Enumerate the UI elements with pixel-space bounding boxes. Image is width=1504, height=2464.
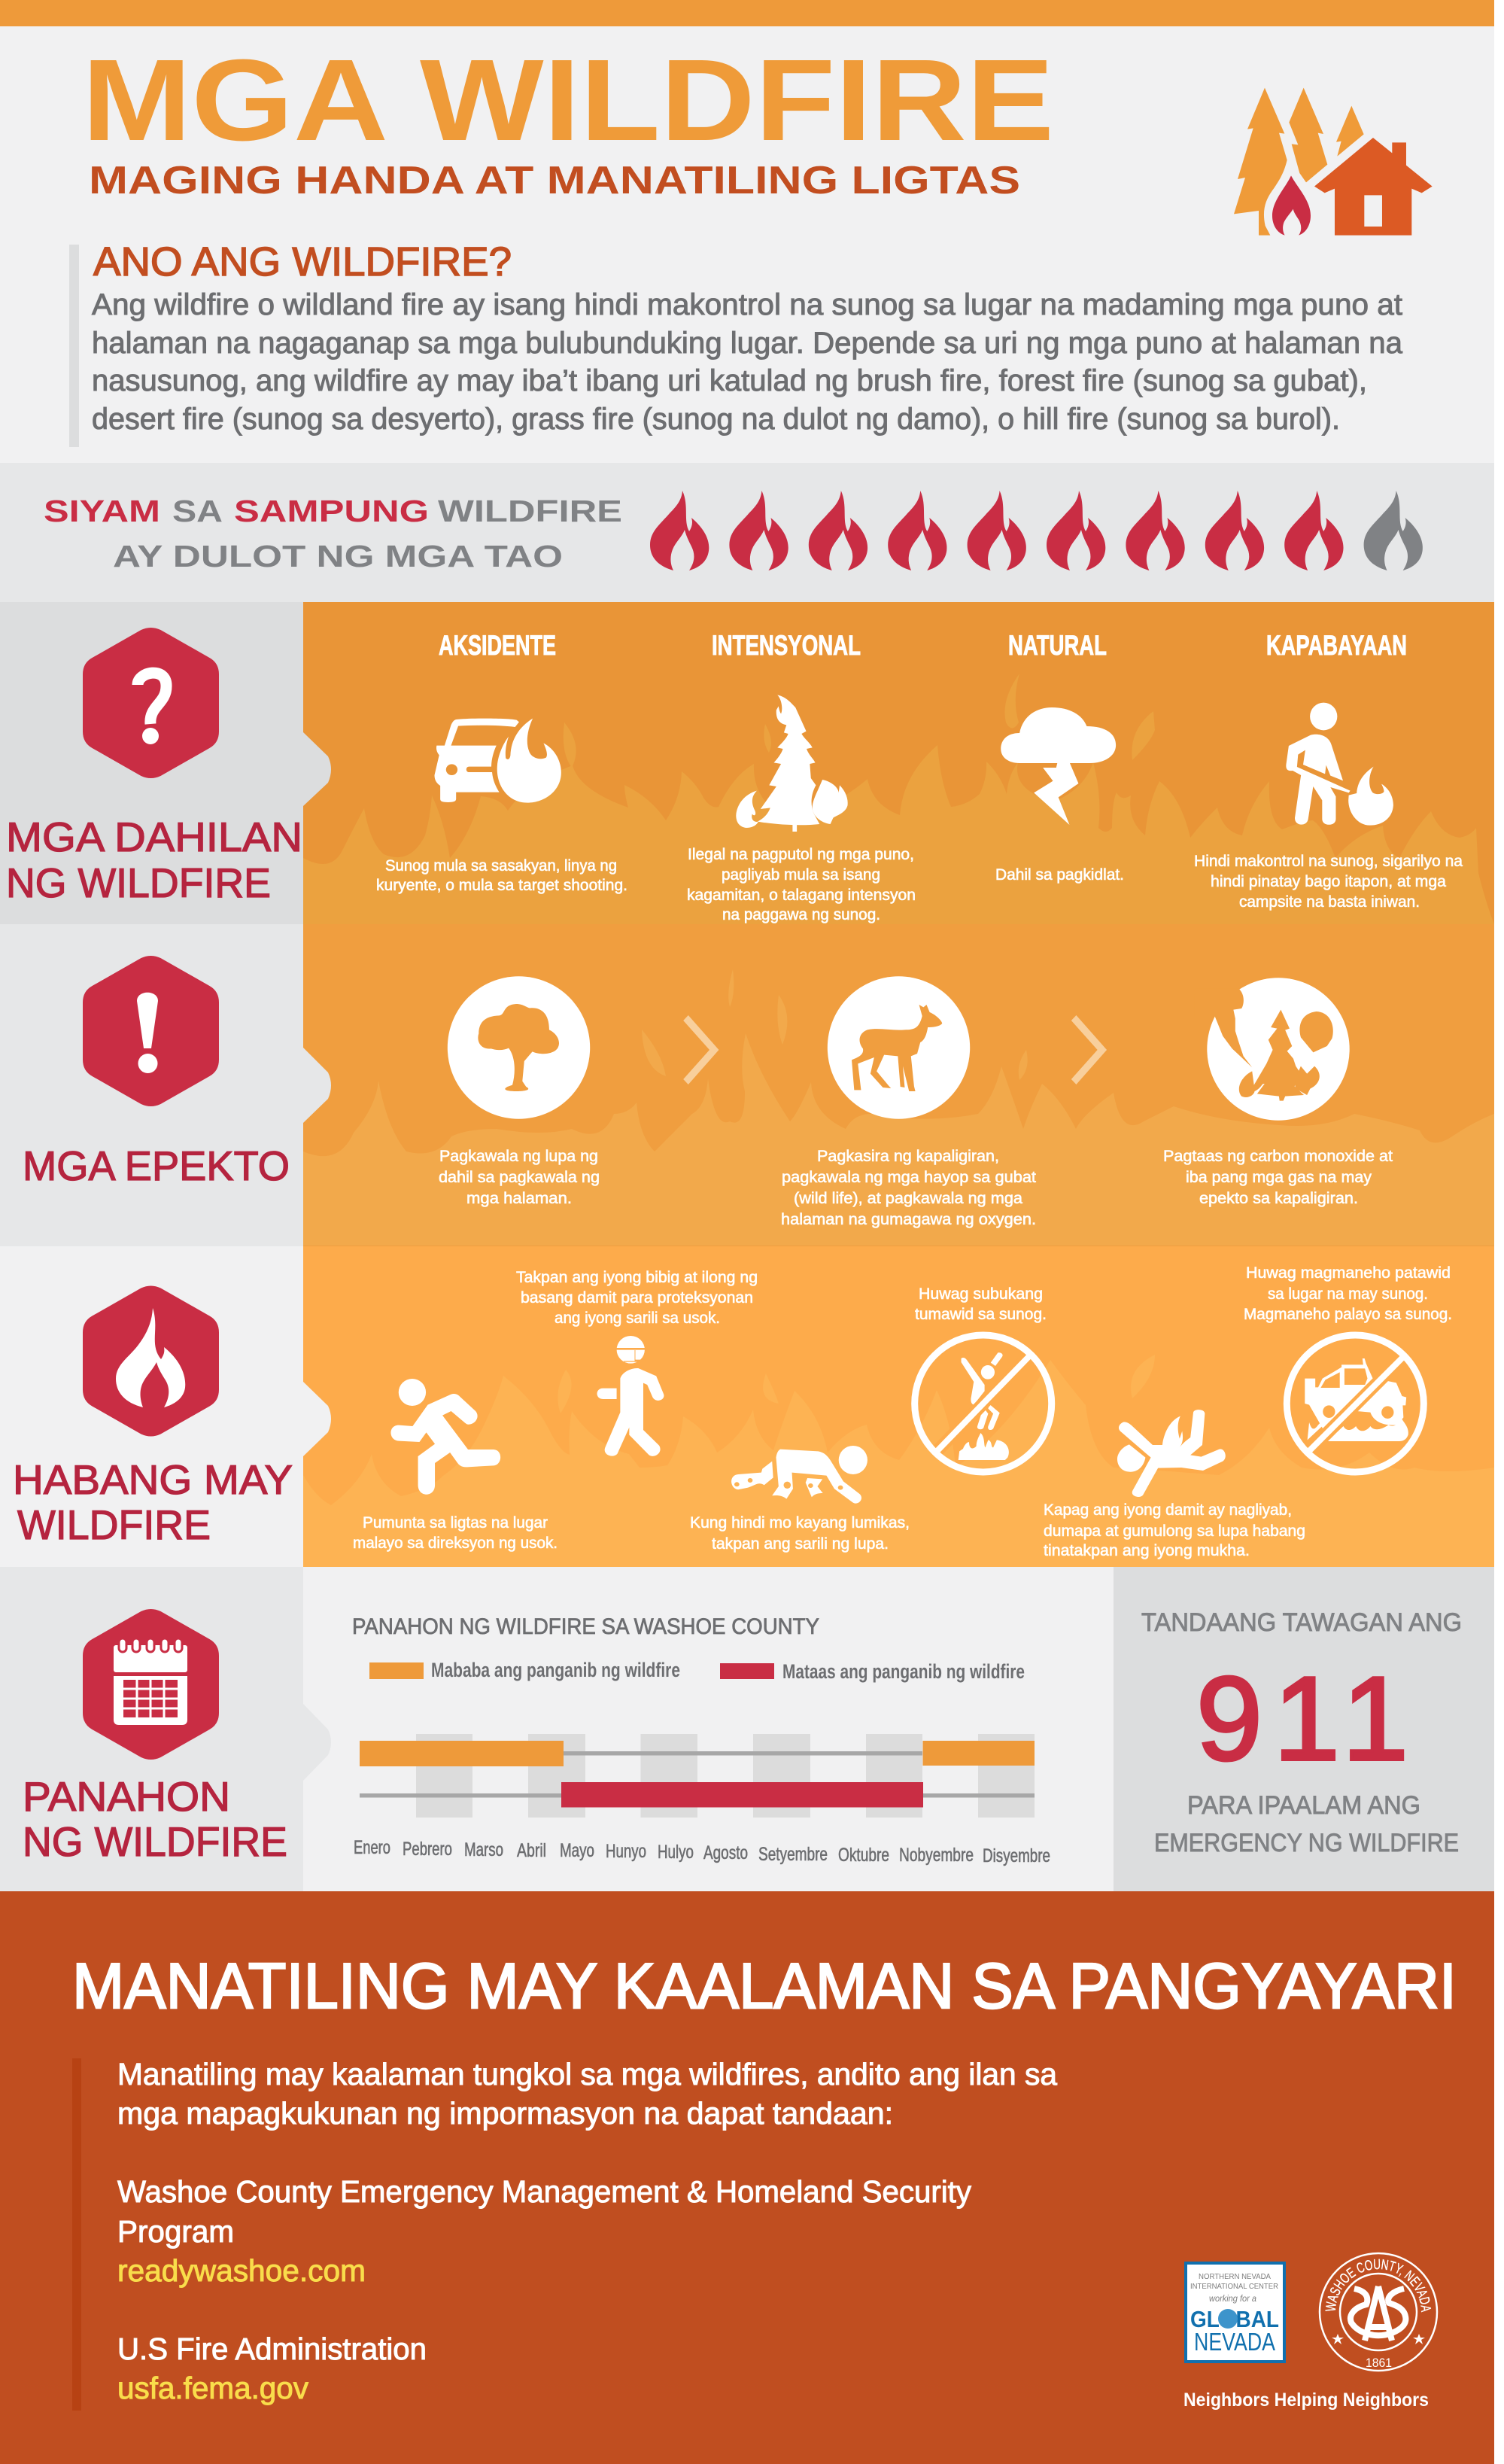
report text: EMERGENCY NG WILDFIRE (1154, 1829, 1459, 1857)
statistic text: SIYAM (44, 494, 160, 528)
subtitle: MAGING HANDA AT MANATILING LIGTAS (89, 159, 1020, 202)
icon: flame hexagon (83, 1285, 219, 1436)
caption: stop drop roll: dumapa at gumulong sa lupa habang (1044, 1523, 1305, 1540)
caption: do not drive through: Huwag magmaneho patawid (1246, 1264, 1451, 1282)
icon: tree in circle (448, 976, 590, 1119)
caption: go to safety (353, 1514, 558, 1552)
statistic text: AY DULOT NG MGA TAO (113, 539, 563, 573)
footer title: MANATILING MAY KAALAMAN SA PANGYAYARI (72, 1951, 1457, 2022)
icon: calendar hexagon (83, 1609, 219, 1760)
logo: Washoe County seal (1318, 2252, 1439, 2372)
caption: intensyonal (687, 846, 916, 923)
caption: do not cross: tumawid sa sunog. (915, 1306, 1047, 1323)
logo: Washoe County seal: WASHOE COUNTY, NEVADA (1325, 2259, 1431, 2312)
caption: go to safety: Pumunta sa ligtas na lugar (363, 1514, 548, 1532)
arrow tab (303, 732, 331, 806)
caption: do not drive through (1244, 1264, 1452, 1323)
caption: kapabayaan: hindi pinatay bago itapon, at mga (1211, 873, 1446, 890)
arrow tab (303, 1382, 331, 1456)
icon: no crossing fire (915, 1335, 1052, 1472)
label: causes (6, 814, 302, 906)
chart month labels: Abril (517, 1840, 546, 1861)
statistic text (44, 494, 622, 573)
arrow: chevron (683, 1015, 719, 1084)
report text: PARA IPAALAM ANG (1187, 1791, 1420, 1820)
caption: do not cross (915, 1285, 1047, 1323)
chart month labels: Marso (464, 1839, 503, 1860)
call text: TANDAANG TAWAGAN ANG (1141, 1608, 1462, 1637)
caption: do not drive through: Magmaneho palayo sa sunog. (1244, 1306, 1452, 1323)
panel: during a wildfire (0, 1246, 1494, 1567)
body text: definition: Ang wildfire o wildland fire ay isang hindi makontrol na sunog sa lugar na madaming mga puno at (92, 288, 1402, 321)
icon: burning car (434, 719, 561, 803)
caption: do not drive through: sa lugar na may sunog. (1268, 1285, 1428, 1303)
intro text: mga mapagkukunan ng impormasyon na dapat tandaan: (117, 2096, 893, 2131)
resource: Washoe County: Program (117, 2214, 234, 2249)
icon: person with burning clothes (1117, 1410, 1226, 1497)
caption: environment damage (781, 1148, 1036, 1228)
chart month labels: Hulyo (658, 1842, 694, 1863)
caption: stop drop roll: tinatakpan ang iyong mukha. (1044, 1542, 1250, 1559)
label: season (23, 1773, 287, 1865)
label: during wildfire (13, 1456, 293, 1548)
caption: cover mouth (516, 1269, 758, 1327)
statistic text: SAMPUNG (234, 494, 429, 528)
icon: deer in circle (828, 976, 970, 1119)
logo: Global Nevada: GLOBAL (1190, 2306, 1279, 2332)
chart month labels: Hunyo (606, 1841, 646, 1862)
caption: carbon monoxide: Pagtaas ng carbon monoxide at (1163, 1148, 1393, 1165)
header panel (0, 26, 1494, 463)
chart month labels: Disyembre (983, 1845, 1050, 1866)
intro text: Manatiling may kaalaman tungkol sa mga wildfires, andito ang ilan sa (117, 2057, 1057, 2091)
legend: high risk: Mataas ang panganib ng wildfire (782, 1660, 1025, 1683)
top orange band (0, 0, 1494, 26)
resource: US Fire Administration (117, 2332, 427, 2405)
icon: person covering mouth (597, 1336, 664, 1456)
label: effects: MGA EPEKTO (23, 1142, 290, 1189)
body text: definition: desert fire (sunog sa desyerto), grass fire (sunog na dulot ng damo), o hill fire (sunog sa burol). (92, 403, 1340, 436)
caption: aksidente: Sunog mula sa sasakyan, linya ng (385, 857, 617, 875)
caption: carbon monoxide (1163, 1148, 1393, 1207)
label: during wildfire: WILDFIRE (17, 1501, 211, 1548)
resource: Washoe County: readywashoe.com (117, 2253, 366, 2288)
logo: Global Nevada: NEVADA (1194, 2328, 1275, 2356)
panel: call 911 (1114, 1567, 1494, 1891)
caption: land loss: dahil sa pagkawala ng (439, 1169, 600, 1186)
resource: Washoe County (117, 2174, 971, 2288)
icon: person crawling low (731, 1446, 867, 1504)
body text: definition (92, 288, 1403, 436)
chart month labels: Mayo (560, 1840, 594, 1861)
caption: stop drop roll: Kapag ang iyong damit ay nagliyab, (1044, 1501, 1292, 1519)
chart month labels: Oktubre (838, 1845, 889, 1866)
caption: carbon monoxide: epekto sa kapaligiran. (1199, 1190, 1358, 1207)
resource: US Fire Administration: U.S Fire Administration (117, 2332, 427, 2366)
icon: burning tree (736, 695, 848, 832)
chart month labels: Setyembre (758, 1844, 828, 1865)
chart month labels: Pebrero (403, 1839, 452, 1860)
panel: nine in ten statistic (0, 463, 1494, 602)
legend: high risk (720, 1660, 1025, 1683)
heading: intensyonal: INTENSYONAL (712, 630, 861, 661)
label: during wildfire: HABANG MAY (13, 1456, 293, 1503)
caption: take cover: takpan ang sarili ng lupa. (712, 1535, 889, 1553)
arrow: chevron (1071, 1015, 1107, 1084)
icon row: ten flames (650, 491, 1423, 570)
panel: effects of wildfire (0, 924, 1494, 1246)
chart month labels: Agosto (703, 1842, 748, 1863)
number 911: 911 (1196, 1653, 1420, 1785)
caption: do not cross: Huwag subukang (919, 1285, 1043, 1303)
panel: wildfire season (0, 1567, 1114, 1891)
caption: kapabayaan: campsite na basta iniwan. (1239, 893, 1420, 911)
label: season: NG WILDFIRE (23, 1818, 287, 1865)
heading: aksidente: AKSIDENTE (439, 630, 556, 661)
icon: trees, flame and house (1234, 88, 1433, 236)
caption: intensyonal: Ilegal na pagputol ng mga puno, (688, 846, 914, 863)
caption: cover mouth: ang iyong sarili sa usok. (555, 1310, 720, 1327)
caption: intensyonal: pagliyab mula sa isang (722, 866, 880, 884)
caption: aksidente: kuryente, o mula sa target shooting. (376, 877, 627, 894)
panel: stay informed footer (0, 1891, 1494, 2464)
chart month labels: Nobyembre (899, 1845, 974, 1866)
caption: environment damage: (wild life), at pagkawala ng mga (794, 1190, 1022, 1207)
label: causes: NG WILDFIRE (6, 859, 271, 906)
statistic text: SA (172, 494, 223, 528)
footer side bar (72, 2058, 81, 2411)
caption: environment damage: pagkawala ng mga hayop sa gubat (782, 1169, 1036, 1186)
chart: risk by month (360, 1734, 1035, 1818)
legend: low risk (369, 1659, 680, 1681)
title: MGA WILDFIRE (82, 35, 1054, 165)
logo: Global Nevada (1186, 2263, 1284, 2362)
caption: go to safety: malayo sa direksyon ng usok. (353, 1535, 558, 1552)
caption: cover mouth: Takpan ang iyong bibig at ilong ng (516, 1269, 758, 1286)
caption: carbon monoxide: iba pang mga gas na may (1186, 1169, 1372, 1186)
caption: take cover (690, 1514, 910, 1553)
label: season: PANAHON (23, 1773, 230, 1820)
heading: what is wildfire: ANO ANG WILDFIRE? (93, 239, 512, 284)
body text: definition: nasusunog, ang wildfire ay may iba’t ibang uri katulad ng brush fire, forest fire (sunog sa gubat), (92, 364, 1367, 397)
heading: kapabayaan: KAPABAYAAN (1266, 630, 1407, 661)
caption: stop drop roll (1044, 1501, 1305, 1559)
caption: take cover: Kung hindi mo kayang lumikas, (690, 1514, 910, 1532)
report text (1154, 1791, 1459, 1857)
logo: Washoe County seal: 1861 (1366, 2356, 1392, 2370)
resource: US Fire Administration: usfa.fema.gov (117, 2371, 308, 2405)
what is wildfire side bar (69, 245, 79, 447)
logo: Global Nevada: NORTHERN NEVADA (1199, 2272, 1271, 2281)
icon: gases and burning tree in circle (1195, 978, 1350, 1121)
caption: intensyonal: na paggawa ng sunog. (722, 906, 880, 923)
caption: environment damage: Pagkasira ng kapaligiran, (817, 1148, 999, 1165)
tagline: Neighbors Helping Neighbors (1183, 2389, 1429, 2411)
caption: natural: Dahil sa pagkidlat. (995, 866, 1124, 884)
caption: intensyonal: kagamitan, o talagang intensyon (687, 887, 916, 904)
body text: definition: halaman na nagaganap sa mga bulubunduking lugar. Depende sa uri ng mga puno at halaman na (92, 327, 1403, 360)
chart month labels (354, 1837, 1050, 1866)
caption: land loss: mga halaman. (466, 1190, 572, 1207)
heading: natural: NATURAL (1008, 630, 1107, 661)
chart title: PANAHON NG WILDFIRE SA WASHOE COUNTY (352, 1614, 819, 1639)
intro text (117, 2057, 1057, 2131)
caption: kapabayaan: Hindi makontrol na sunog, sigarilyo na (1194, 853, 1463, 870)
logo: Global Nevada: working for a (1209, 2293, 1256, 2304)
legend: low risk: Mababa ang panganib ng wildfire (431, 1659, 680, 1681)
caption: land loss: Pagkawala ng lupa ng (439, 1148, 598, 1165)
arrow tab (303, 1704, 331, 1781)
caption: cover mouth: basang damit para proteksyonan (521, 1289, 753, 1307)
caption: environment damage: halaman na gumagawa ng oxygen. (781, 1211, 1036, 1228)
icon: no driving through fire (1287, 1335, 1423, 1472)
caption: land loss (439, 1148, 600, 1207)
icon: running person (390, 1379, 500, 1495)
statistic text: WILDFIRE (438, 494, 622, 528)
logo: Global Nevada: INTERNATIONAL CENTER (1190, 2282, 1278, 2291)
panel: causes of wildfire (0, 602, 1494, 924)
chart month labels: Enero (354, 1837, 390, 1858)
icon: person shovelling fire (1286, 703, 1393, 826)
caption: kapabayaan (1194, 853, 1463, 911)
icon: lightning cloud (1001, 707, 1116, 825)
icon: exclamation hexagon (83, 956, 219, 1106)
resource: Washoe County: Washoe County Emergency Management & Homeland Security (117, 2174, 971, 2209)
label: causes: MGA DAHILAN (6, 814, 302, 860)
arrow tab (303, 1048, 331, 1123)
caption: aksidente (376, 857, 627, 894)
icon: question mark hexagon (83, 628, 219, 778)
